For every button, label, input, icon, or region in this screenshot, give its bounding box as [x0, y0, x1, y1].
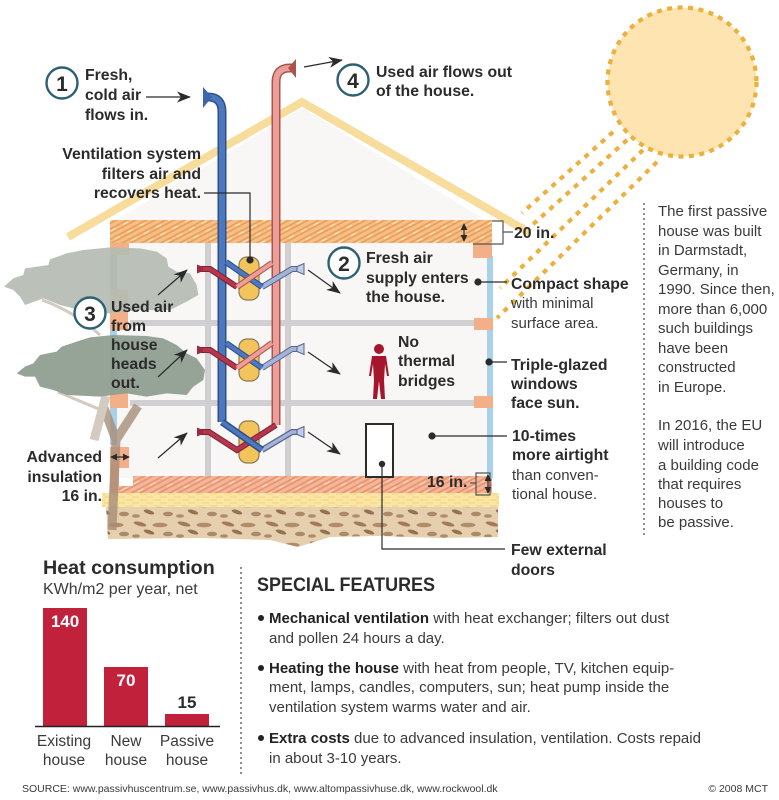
- step 1 badge: 1: [56, 73, 68, 96]
- history text block: house was built: [658, 223, 762, 240]
- bar chart: house: [105, 752, 147, 769]
- history text block: Germany, in: [658, 262, 739, 279]
- step 3 label: from: [111, 318, 146, 335]
- credit: © 2008 MCT: [708, 783, 769, 795]
- airtight label: than conven-: [512, 467, 599, 484]
- triple-glazed windows label: face sun.: [511, 395, 579, 412]
- ventilation system label: filters air and: [102, 166, 201, 183]
- history text block: will introduce: [657, 437, 745, 454]
- bar chart: house: [166, 752, 208, 769]
- walls and windows: [110, 243, 493, 493]
- ventilation system label: recovers heat.: [94, 185, 201, 202]
- feature: extra costs: [258, 730, 701, 767]
- sun rays: [497, 132, 657, 318]
- dimension arrows: [111, 224, 488, 493]
- feature: mechanical ventilation: with heat exchanger; filters out dust: [429, 610, 670, 627]
- heat consumption heading: Heat consumption: [43, 557, 215, 579]
- bar chart: Existing: [37, 733, 91, 750]
- bar chart: 70: [117, 671, 135, 690]
- bar chart: 140: [51, 612, 79, 631]
- tree: [4, 247, 205, 530]
- step 3 label: Used air: [111, 299, 173, 316]
- special features heading: SPECIAL FEATURES: [257, 575, 435, 596]
- history text block: houses to: [658, 495, 723, 512]
- airtight label: tional house.: [512, 486, 597, 503]
- history text block: in Europe.: [658, 379, 726, 396]
- step 1 label: Fresh,: [85, 67, 132, 84]
- divider lines: [241, 203, 644, 775]
- roof: [68, 102, 530, 237]
- flow arrows: [146, 60, 342, 458]
- step 4 label: of the house.: [376, 83, 474, 100]
- history text block: In 2016, the EU: [658, 417, 762, 434]
- feature: extra costs: Extra costs: [269, 730, 350, 747]
- no thermal bridges label: thermal: [398, 353, 455, 370]
- no thermal bridges label: No: [398, 334, 419, 351]
- bar chart: house: [43, 752, 85, 769]
- advanced insulation label: insulation: [27, 469, 102, 486]
- history text block: more than 6,000: [658, 301, 767, 318]
- step 1 label: cold air: [85, 87, 141, 104]
- person icon: [369, 344, 389, 399]
- exhaust air pipe: [198, 59, 296, 450]
- step 3 label: heads: [111, 356, 157, 373]
- history text block: have been: [658, 340, 728, 357]
- step 3 badge: [74, 298, 106, 328]
- advanced insulation label: 16 in.: [62, 488, 102, 505]
- floor insulation: [118, 476, 492, 493]
- step 2 badge: 2: [338, 253, 350, 276]
- compact shape label: Compact shape: [511, 276, 629, 293]
- gravel layer: [102, 493, 499, 507]
- step 4 badge: 4: [347, 70, 359, 93]
- step 3 badge: 3: [84, 303, 96, 326]
- ventilation system label: Ventilation system: [62, 146, 201, 163]
- leader lines and dots: [204, 193, 513, 495]
- 16 in label: 16 in.: [427, 474, 467, 491]
- feature: heating the house: Heating the house: [269, 660, 399, 677]
- step 3 label: house: [111, 337, 158, 354]
- compact shape label: surface area.: [511, 315, 599, 332]
- feature: extra costs: due to advanced insulation, ventilation. Costs repaid: [350, 730, 701, 747]
- feature: heating the house: with heat from people, TV, kitchen equip-: [399, 660, 674, 677]
- step 2 label: Fresh air: [366, 250, 433, 267]
- feature: mechanical ventilation: and pollen 24 hours a day.: [269, 630, 445, 647]
- step 1 badge: [46, 68, 78, 98]
- external doors label: Few external: [511, 542, 607, 559]
- feature: heating the house: [258, 660, 674, 716]
- airtight label: more airtight: [512, 447, 609, 464]
- feature: heating the house: ment, lamps, candles, computers, sun; heat pump inside the: [269, 679, 669, 696]
- no thermal bridges label: bridges: [398, 373, 455, 390]
- bar chart: [35, 608, 220, 769]
- source line: SOURCE: www.passivhuscentrum.se, www.passivhus.dk, www.altompassivhuse.dk, www.rockwool.dk: [22, 783, 498, 795]
- branch ducts upper floors: [198, 262, 302, 368]
- step 2 label: the house.: [366, 289, 445, 306]
- bar chart: 15: [178, 693, 196, 712]
- duct flanges: [197, 264, 304, 438]
- 20 in label: 20 in.: [514, 225, 554, 242]
- step 4 label: Used air flows out: [376, 64, 513, 81]
- feature: mechanical ventilation: Mechanical ventilation: [269, 610, 429, 627]
- history text block: that requires: [658, 476, 741, 493]
- bar chart: New: [110, 733, 142, 750]
- step 4 badge: [338, 64, 368, 96]
- ground layer: [106, 506, 498, 547]
- triple-glazed windows label: Triple-glazed: [511, 357, 608, 374]
- door: [366, 424, 505, 549]
- step 2 badge: [328, 248, 360, 278]
- step 2 label: supply enters: [366, 270, 469, 287]
- history text block: 1990. Since then,: [658, 281, 775, 298]
- triple-glazed windows label: windows: [510, 376, 578, 393]
- bar chart: Passive: [160, 733, 214, 750]
- history text block: constructed: [658, 359, 736, 376]
- history text block: be passive.: [658, 514, 734, 531]
- ceiling insulation: [110, 220, 492, 243]
- step 3 label: out.: [111, 375, 140, 392]
- feature: heating the house: ventilation system warms water and air.: [269, 699, 531, 716]
- advanced insulation label: Advanced: [26, 449, 102, 466]
- compact shape label: with minimal: [510, 295, 594, 312]
- sun: [608, 8, 756, 156]
- history text block: The first passive: [658, 203, 767, 220]
- grey floors and studs: [130, 243, 480, 476]
- feature: mechanical ventilation: [258, 610, 670, 647]
- heat consumption unit: KWh/m2 per year, net: [43, 581, 198, 598]
- house interior: [110, 108, 492, 478]
- airtight label: 10-times: [512, 428, 576, 445]
- history text block: a building code: [658, 457, 759, 474]
- step 1 label: flows in.: [85, 107, 148, 124]
- history text block: such buildings: [658, 320, 753, 337]
- fresh air pipe: [203, 87, 302, 450]
- history text block: in Darmstadt,: [658, 242, 747, 259]
- ventilation units: [239, 257, 259, 463]
- external doors label: doors: [511, 562, 555, 579]
- feature: extra costs: in about 3-10 years.: [269, 750, 402, 767]
